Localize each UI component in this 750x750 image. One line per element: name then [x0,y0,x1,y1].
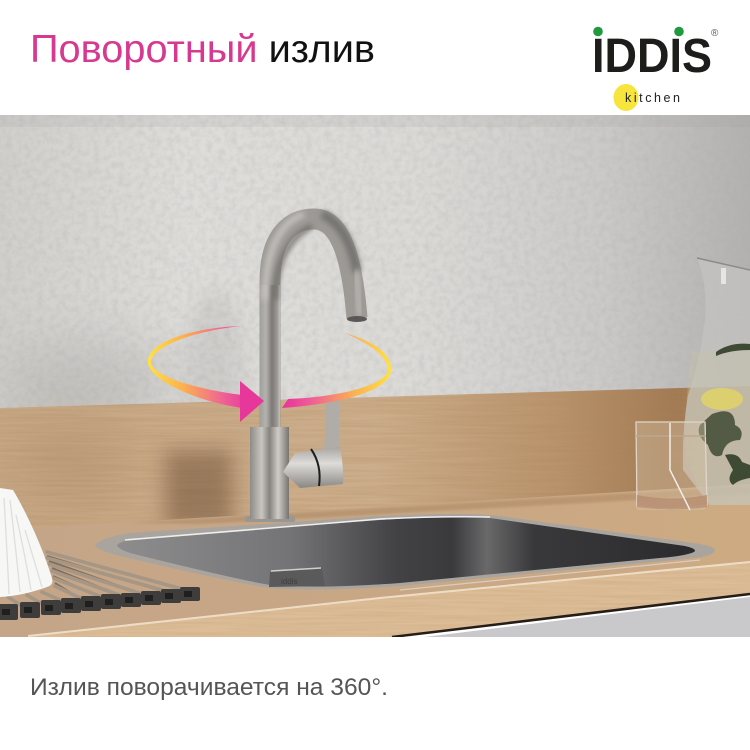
countertop front edge [0,560,750,640]
countertop [0,484,750,640]
glass base [637,495,707,510]
sink drain cover with brand [269,568,325,587]
faucet [245,214,367,522]
logo: IDDIS kitchen [592,27,719,111]
kitchen photo scene [0,115,750,640]
wall [0,115,750,408]
logo green dot left [593,27,603,36]
lemon slice [701,388,743,410]
rack feet [0,587,200,620]
rack feet holes [2,591,192,615]
glass water line [636,435,706,437]
faucet spout [260,214,360,430]
sink basin [117,517,695,587]
cabinet below the counter [425,597,750,637]
drying rack [0,552,200,620]
faucet base ring [245,516,295,522]
left arc of rotation arrow [148,326,242,408]
wooden backsplash [0,386,750,528]
mint leaves [699,344,750,485]
logo wordmark: IDDIS [592,30,712,83]
logo green dot right [674,27,684,36]
faucet lever [323,400,339,450]
logo yellow circle [614,84,638,111]
rack rail shadows [47,555,161,592]
carafe highlight [721,268,726,284]
sink rim [95,514,715,590]
glass highlight [670,423,690,510]
carafe water [686,350,750,404]
rack rails [8,552,182,606]
rotation arrow [148,326,391,422]
caption: Излив поворачивается на 360°. [30,674,388,701]
right arc of rotation arrow [282,333,391,408]
logo kitchen word: kitchen [625,91,680,105]
sink [95,514,715,590]
faucet body cylinder [250,427,289,519]
carafe body [683,258,750,505]
carafe rim [697,258,750,270]
drinking glass [636,422,707,510]
logo registered mark: ® [711,28,719,39]
faucet aerator [347,316,367,322]
white bowl [0,488,52,597]
sink drain cover with brand: iddis [281,577,297,586]
title: Поворотный излив [30,28,375,71]
arrowhead [240,381,264,422]
glass carafe [683,258,750,505]
faucet handle [283,447,343,488]
glass tint [636,422,706,510]
glass outline [636,422,707,509]
